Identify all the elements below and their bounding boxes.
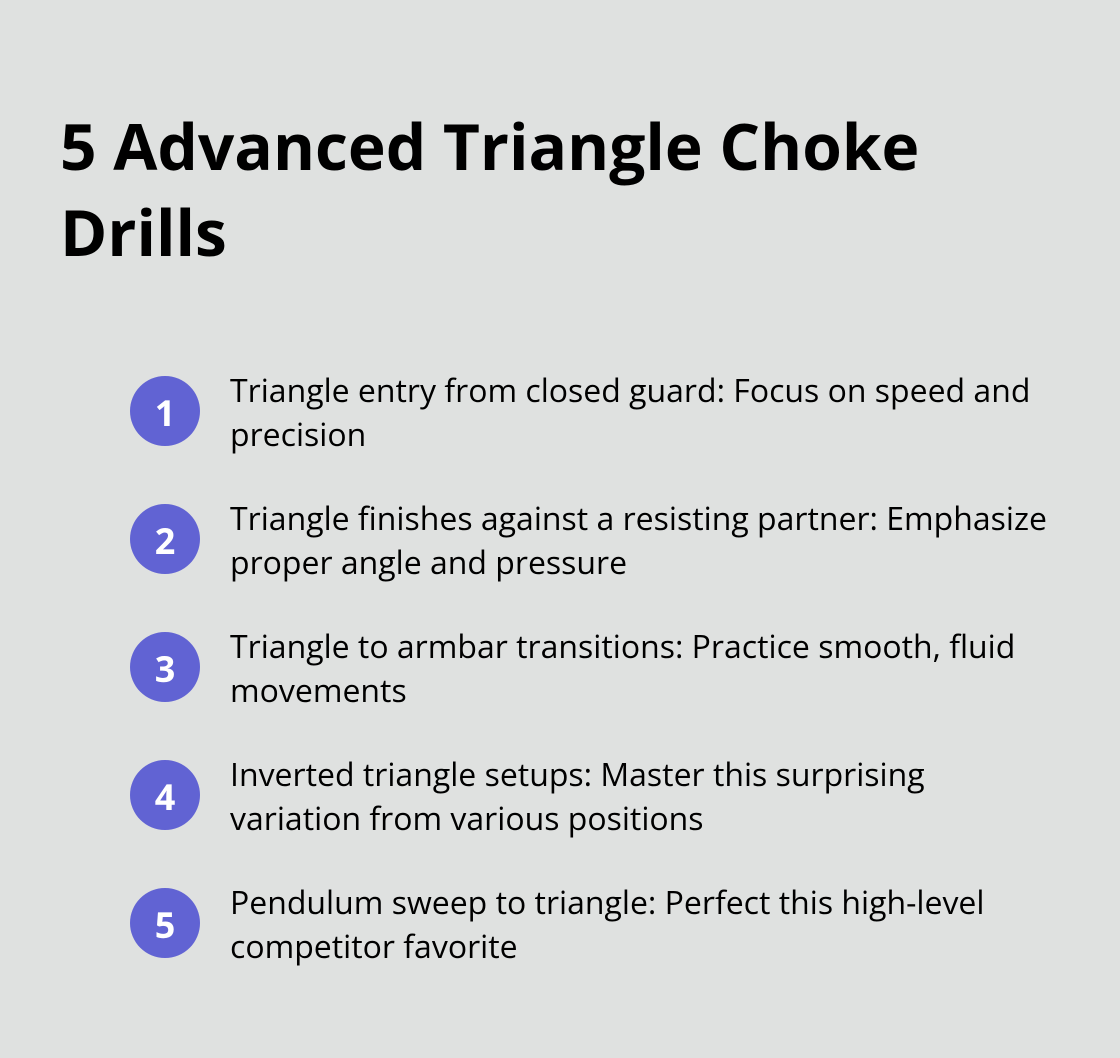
drill 5 bbox=[130, 881, 984, 968]
drill 2 bbox=[130, 497, 1047, 584]
drill 4 text: Inverted triangle setups: Master this surprising bbox=[230, 753, 925, 796]
drill 1 text bbox=[230, 369, 1030, 456]
number badge 5: 5 bbox=[155, 900, 175, 949]
title: 5 Advanced Triangle Choke bbox=[60, 102, 919, 189]
number badge 3 bbox=[130, 632, 200, 702]
drill 4 text bbox=[230, 753, 925, 840]
drill 4 text: variation from various positions bbox=[230, 797, 704, 840]
number badge 1 bbox=[130, 376, 200, 446]
drill 5 text: competitor favorite bbox=[230, 925, 518, 968]
drill 5 text: Pendulum sweep to triangle: Perfect this high-level bbox=[230, 881, 984, 924]
number badge 4 bbox=[130, 760, 200, 830]
number badge 2: 2 bbox=[155, 516, 175, 565]
list of drills bbox=[130, 369, 1047, 968]
drill 3 bbox=[130, 625, 1015, 712]
drill 3 text: Triangle to armbar transitions: Practice smooth, fluid bbox=[230, 625, 1015, 668]
drill 2 text: proper angle and pressure bbox=[230, 541, 627, 584]
drill 3 text: movements bbox=[230, 669, 407, 712]
drill 2 text bbox=[230, 497, 1047, 584]
number badge 3: 3 bbox=[155, 644, 175, 693]
drill 2 text: Triangle finishes against a resisting partner: Emphasize bbox=[230, 497, 1047, 540]
number badge 4: 4 bbox=[155, 772, 175, 821]
number badge 2 bbox=[130, 504, 200, 574]
title: Drills bbox=[60, 188, 227, 275]
drill 1 text: precision bbox=[230, 413, 366, 456]
number badge 5 bbox=[130, 888, 200, 958]
number badge 1: 1 bbox=[155, 388, 175, 437]
drill 4 bbox=[130, 753, 925, 840]
drill 3 text bbox=[230, 625, 1015, 712]
drill 1 bbox=[130, 369, 1030, 456]
title bbox=[60, 102, 919, 275]
drill 5 text bbox=[230, 881, 984, 968]
drill 1 text: Triangle entry from closed guard: Focus on speed and bbox=[230, 369, 1030, 412]
